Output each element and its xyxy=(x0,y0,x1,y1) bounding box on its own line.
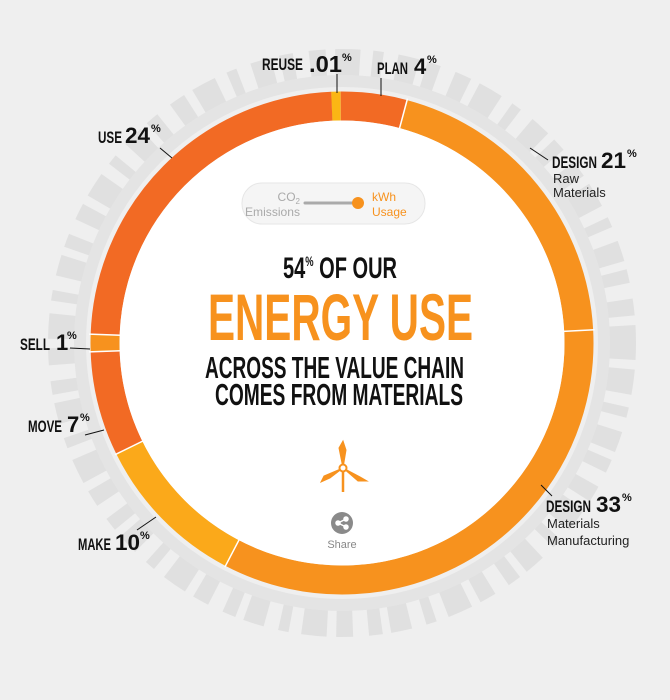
label: sell xyxy=(20,330,90,355)
label: sell: 1 xyxy=(56,330,68,355)
label: design raw materials: % xyxy=(627,148,637,160)
label: reuse xyxy=(262,51,352,93)
label: use xyxy=(98,123,172,158)
label: design raw materials xyxy=(530,148,637,200)
label: design raw materials: DESIGN xyxy=(552,153,597,172)
label: design materials manufacturing: Manufacturing xyxy=(547,533,629,548)
label: make: 10 xyxy=(115,530,140,555)
label: design materials manufacturing: DESIGN xyxy=(546,497,591,516)
toggle: CO2 / kWh xyxy=(242,183,425,224)
label: use: USE xyxy=(98,128,122,147)
label: reuse: REUSE xyxy=(262,55,303,74)
headline: ENERGY USE xyxy=(208,280,473,354)
headline: 54 xyxy=(283,252,316,285)
share button: Share xyxy=(327,539,357,551)
headline: ACROSS THE VALUE CHAIN xyxy=(205,350,464,385)
label: reuse: .01 xyxy=(309,51,342,77)
toggle: CO2 / kWh: Emissions xyxy=(245,205,300,219)
label: move: 7 xyxy=(67,412,79,437)
label: reuse: % xyxy=(342,52,352,64)
label: use: % xyxy=(151,123,161,135)
label: design raw materials: Materials xyxy=(553,185,606,200)
share button xyxy=(327,512,357,551)
headline: % xyxy=(305,253,314,269)
label: sell: % xyxy=(67,330,77,342)
label: make xyxy=(78,517,156,555)
label: plan: % xyxy=(427,54,437,66)
background icon ring xyxy=(66,67,618,619)
label: plan: 4 xyxy=(414,54,427,79)
label: design materials manufacturing: Materials xyxy=(547,516,600,531)
label: make: MAKE xyxy=(78,535,111,554)
label: design materials manufacturing: 33 xyxy=(596,492,621,517)
label: design materials manufacturing xyxy=(541,485,632,548)
headline xyxy=(205,252,473,412)
headline: COMES FROM MATERIALS xyxy=(215,377,463,412)
label: sell: SELL xyxy=(20,335,50,354)
label: plan: PLAN xyxy=(377,59,408,78)
toggle: CO2 / kWh: kWh xyxy=(372,190,396,204)
label: plan xyxy=(377,54,437,96)
toggle: CO2 / kWh: Usage xyxy=(372,205,407,219)
label: move xyxy=(28,412,104,437)
icon: wind turbine xyxy=(321,441,367,492)
label: use: 24 xyxy=(125,123,151,148)
toggle: CO2 / kWh: CO xyxy=(278,190,296,204)
label: design materials manufacturing: % xyxy=(622,492,632,504)
label: move: MOVE xyxy=(28,417,62,436)
headline: OF OUR xyxy=(314,252,397,285)
label: design raw materials: 21 xyxy=(601,148,626,173)
label: design raw materials: Raw xyxy=(553,171,580,186)
label: move: % xyxy=(80,412,90,424)
toggle: CO2 / kWh: 2 xyxy=(296,197,301,206)
label: make: % xyxy=(140,530,150,542)
